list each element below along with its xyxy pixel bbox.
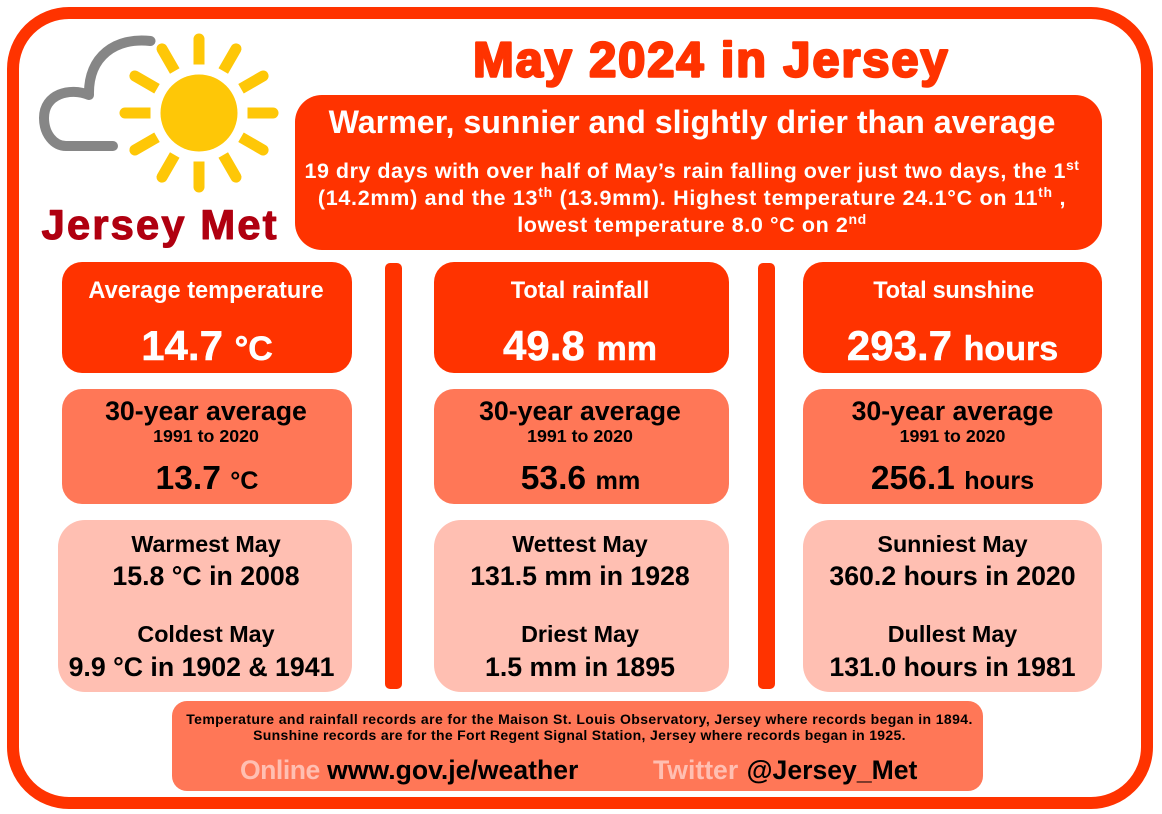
panel: sunshine records — [803, 520, 1102, 692]
wettest label: Wettest May — [512, 531, 648, 557]
dullest value: 131.0 hours in 1981 — [829, 652, 1076, 682]
warmest label: Warmest May — [131, 531, 281, 557]
summary text: 19 dry days with over half of May’s rain falling over just two days, the 1st — [305, 157, 1079, 183]
warmest value: 15.8 °C in 2008 — [112, 561, 300, 591]
summary heading: Warmer, sunnier and slightly drier than average — [329, 104, 1055, 140]
records note: Temperature and rainfall records are for the Maison St. Louis Observatory, Jersey where records began in 1894. — [186, 710, 973, 726]
records note: Sunshine records are for the Fort Regent Signal Station, Jersey where records began in 1925. — [253, 726, 906, 742]
panel: rainfall 30-year average — [434, 389, 729, 504]
panel: average temperature — [62, 262, 352, 373]
panel: summary — [295, 95, 1102, 250]
records note — [186, 710, 973, 743]
period: 1991 to 2020 — [153, 426, 259, 446]
logo: Jersey Met — [39, 34, 279, 248]
value: 14.7 °C — [141, 322, 273, 369]
value: 256.1 hours — [871, 460, 1034, 497]
panel: total rainfall — [434, 262, 729, 373]
sunniest value: 360.2 hours in 2020 — [829, 561, 1076, 591]
coldest value: 9.9 °C in 1902 & 1941 — [69, 652, 334, 682]
twitter link: Twitter @Jersey_Met — [653, 755, 917, 785]
website link: Online www.gov.je/weather — [240, 755, 578, 785]
coldest label: Coldest May — [137, 621, 275, 647]
heading: 30-year average — [479, 396, 681, 426]
wettest value: 131.5 mm in 1928 — [470, 561, 690, 591]
heading: Average temperature — [88, 278, 324, 304]
summary text — [305, 157, 1079, 237]
panel: temperature records — [58, 520, 352, 692]
icon: cloud and sun — [39, 34, 278, 192]
title: May 2024 in Jersey — [473, 34, 949, 88]
period: 1991 to 2020 — [900, 426, 1005, 446]
driest label: Driest May — [521, 621, 639, 647]
summary text: (14.2mm) and the 13th (13.9mm). Highest temperature 24.1°C on 11th , — [318, 184, 1066, 210]
panel: total sunshine — [803, 262, 1102, 373]
value: 293.7 hours — [847, 322, 1058, 369]
heading: 30-year average — [105, 396, 307, 426]
icon: sun — [120, 34, 278, 192]
heading: 30-year average — [852, 396, 1053, 426]
heading: Total sunshine — [873, 278, 1034, 304]
icon: cloud outline — [44, 40, 150, 146]
driest value: 1.5 mm in 1895 — [485, 652, 675, 682]
sunniest label: Sunniest May — [877, 531, 1028, 557]
divider 2 — [758, 263, 775, 689]
heading: Total rainfall — [511, 278, 649, 304]
dullest label: Dullest May — [888, 621, 1017, 647]
period: 1991 to 2020 — [527, 426, 633, 446]
logo wordmark: Jersey Met — [42, 201, 279, 248]
value: 49.8 mm — [503, 322, 657, 369]
panel: temperature 30-year average — [62, 389, 352, 504]
value: 13.7 °C — [156, 460, 258, 497]
panel: footer — [172, 701, 983, 791]
divider 1 — [385, 263, 402, 689]
panel: sunshine 30-year average — [803, 389, 1102, 504]
summary text: lowest temperature 8.0 °C on 2nd — [517, 211, 867, 237]
value: 53.6 mm — [521, 460, 640, 497]
panel: rainfall records — [434, 520, 729, 692]
